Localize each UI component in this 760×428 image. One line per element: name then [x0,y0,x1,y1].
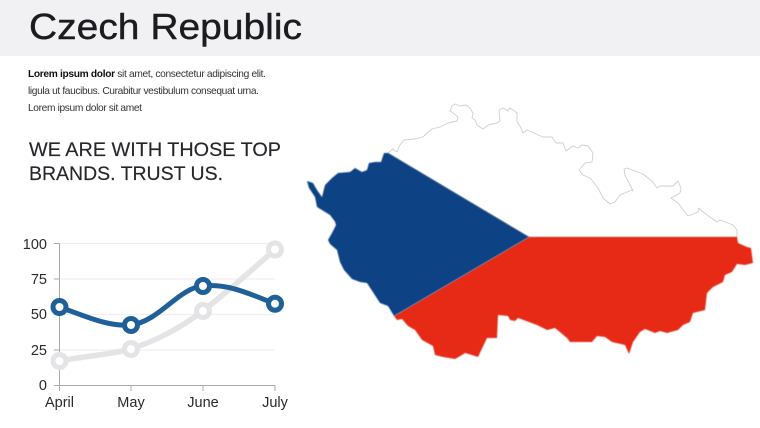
map red region [394,237,753,359]
map white region outline [388,104,737,237]
intro text block: Lorem ipsum dolor sit amet, consectetur adipiscing elit. [28,69,266,80]
axes [54,244,275,391]
series: grey line [53,243,282,368]
y axis labels: 100 [23,237,47,253]
intro text block: Lorem ipsum dolor sit amet [28,103,142,114]
y axis labels: 75 [31,272,47,288]
y axis labels: 25 [31,343,47,359]
grid lines [60,244,275,350]
intro text block [28,69,266,114]
subheading: BRANDS. TRUST US. [29,164,223,185]
header band [0,0,760,56]
x axis labels: July [262,395,289,411]
subheading [29,140,281,185]
x axis labels: April [45,395,74,411]
x axis labels [45,395,289,411]
y axis labels: 0 [39,378,47,394]
y axis labels [23,237,47,394]
title: Czech Republic [29,6,302,47]
intro text block: ligula ut faucibus. Curabitur vestibulum consequat urna. [28,86,259,97]
series: blue line [53,280,282,332]
y axis labels: 50 [31,307,47,323]
x axis labels: June [187,395,219,411]
map blue region [307,153,529,316]
line chart [23,237,289,411]
map: Czech Republic flag [307,104,753,359]
subheading: WE ARE WITH THOSE TOP [29,140,281,161]
x axis labels: May [117,395,145,411]
